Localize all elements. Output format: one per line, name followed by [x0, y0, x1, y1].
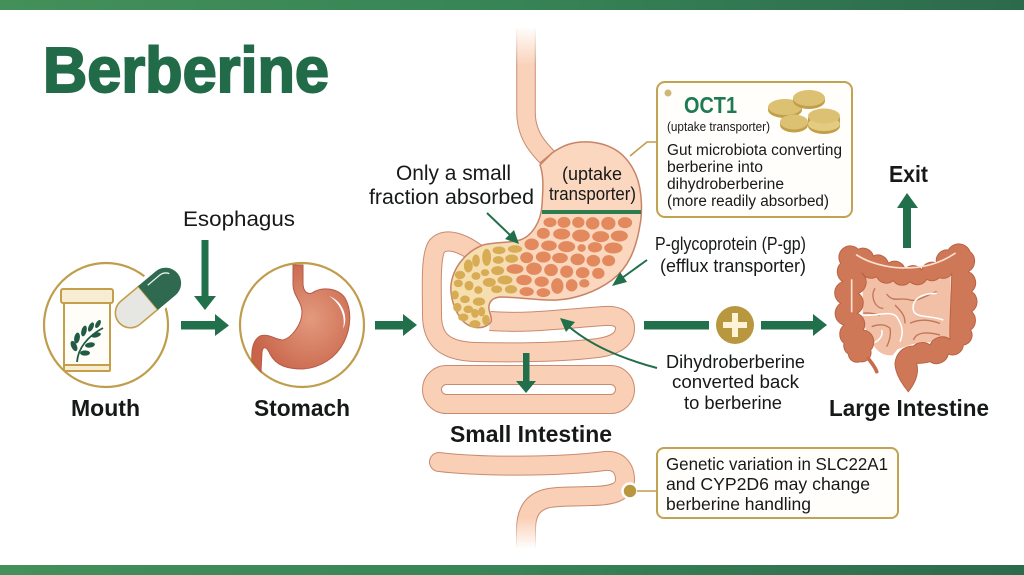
arrow: P-gp [612, 260, 647, 286]
icon: large intestine [835, 244, 977, 392]
text: uptake transporter in stomach: transporter) [549, 183, 636, 204]
text: dihydroberberine converted back: converted back [672, 372, 800, 392]
icon: capsule [104, 256, 192, 340]
icon: herb sprig [69, 319, 103, 362]
icon: mouth circle [44, 263, 168, 387]
bottom banner bar [0, 565, 1024, 575]
callout: genetic variation box: berberine handling [666, 494, 811, 514]
arrow: into small intestine lower [516, 353, 536, 393]
icon: supplement bottle [61, 289, 113, 371]
text: gut microbiota: Gut microbiota converting [667, 142, 842, 159]
mesentery area [862, 275, 952, 356]
callout: genetic variation box: and CYP2D6 may change [666, 474, 870, 494]
text: uptake transporter in stomach [549, 163, 636, 204]
arrow: exit up [897, 193, 918, 248]
appendix [868, 358, 877, 372]
heading: OCT1: OCT1 [684, 92, 737, 118]
label: Small Intestine: Small Intestine [450, 421, 612, 447]
label: Large Intestine: Large Intestine [829, 395, 989, 421]
callout dot on lower intestine [622, 484, 638, 498]
text: gut microbiota: berberine into [667, 159, 763, 176]
text: only a small fraction absorbed: Only a small [396, 162, 511, 185]
junction line [540, 153, 552, 163]
bottom fade of tube [510, 518, 542, 562]
arrow: dihydroberberine curve [560, 318, 657, 368]
top fade of esophagus [510, 26, 542, 66]
white folds [862, 293, 943, 343]
stomach yellow cells [452, 246, 522, 327]
label: Exit: Exit [889, 161, 928, 187]
text: gut microbiota: dihydroberberine [667, 176, 784, 193]
arrow: small intestine to plus [644, 321, 709, 330]
icon: stomach circle [240, 263, 364, 387]
esophagus tube [526, 28, 550, 160]
panel: mouth [44, 256, 192, 421]
arrow: fraction absorbed [487, 213, 519, 244]
panel: digestive tract [432, 26, 641, 562]
text: gut microbiota [667, 142, 842, 210]
icon: stomach highlight [329, 296, 345, 329]
callout: genetic variation box [637, 448, 898, 518]
small bowel squiggles [863, 288, 940, 347]
text: only a small fraction absorbed: fraction absorbed [369, 186, 534, 209]
text: dihydroberberine converted back [666, 352, 805, 413]
small intestine lower loop [439, 461, 625, 546]
label: Mouth: Mouth [71, 395, 140, 421]
text: P-glycoprotein: P-glycoprotein (P-gp) [655, 234, 806, 254]
title: Berberine [43, 34, 329, 106]
stomach body [451, 142, 641, 328]
stomach orange cells [507, 217, 632, 297]
colon highlights [852, 253, 955, 312]
icon: stomach organ [252, 265, 350, 372]
arrow: esophagus down [194, 240, 216, 310]
icon: tablets [768, 90, 840, 134]
small intestine upper loop [432, 241, 625, 352]
panel: stomach [240, 263, 364, 421]
icon: plus circle [716, 306, 754, 344]
label: Esophagus: Esophagus [183, 208, 295, 231]
top banner bar [0, 0, 1024, 10]
label: Stomach: Stomach [254, 395, 350, 421]
green membrane line [542, 210, 641, 214]
text: dihydroberberine converted back: to berberine [684, 393, 782, 413]
text: uptake transporter: (uptake transporter) [667, 120, 770, 134]
text: P-glycoprotein: (efflux transporter) [660, 256, 806, 276]
text: gut microbiota: (more readily absorbed) [667, 193, 829, 210]
text: only a small fraction absorbed [369, 162, 534, 209]
arrow: mouth to stomach [181, 314, 229, 336]
small intestine middle loop [432, 375, 625, 404]
callout: OCT1 box [630, 82, 852, 217]
arrow: stomach to small intestine [375, 314, 417, 336]
colon body [835, 244, 977, 392]
callout: genetic variation box: Genetic variation in SLC22A1 [666, 454, 888, 474]
text: P-glycoprotein [655, 234, 806, 276]
text: uptake transporter in stomach: (uptake [562, 163, 622, 184]
text: dihydroberberine converted back: Dihydroberberine [666, 352, 805, 372]
arrow: plus to large intestine [761, 314, 827, 336]
